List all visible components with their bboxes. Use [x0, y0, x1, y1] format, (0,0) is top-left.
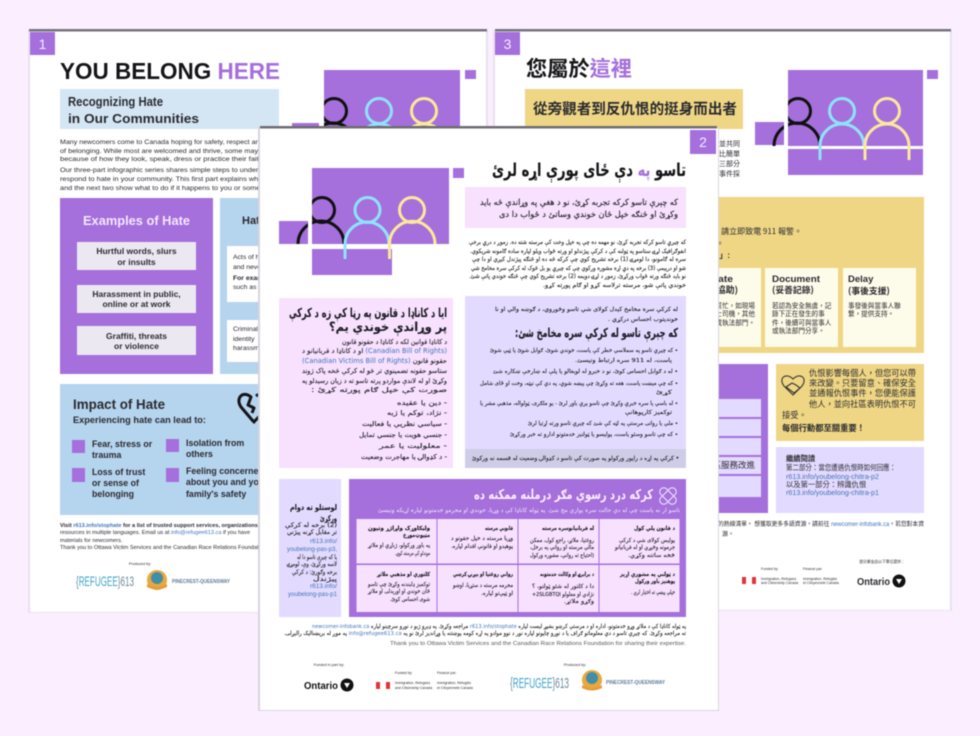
logos: Refugee 613 and Pinecrest-Queensway: {REFUGEE}613: [76, 573, 134, 589]
callout: every action matters: [776, 364, 924, 441]
intro text: [60, 139, 291, 192]
intro text: 三部分: [719, 159, 740, 168]
footer text: Thank you to Ottawa Victim Services and the Canadian Race Relations Foundation: [60, 545, 266, 551]
panel: examples of hate: Harassment in public,: [92, 289, 181, 299]
panel: reporting options: [500, 364, 768, 513]
panel: hate incidents and hate crimes: harassment: [233, 345, 269, 352]
page number 1: 1: [39, 36, 47, 52]
page 2: Pashto: [258, 126, 719, 711]
intro text: 比簡單: [719, 149, 740, 158]
footer text: په ټوله کاناډا کې د ملاتړ وړو خدمتونو، اداره او د مرستې کرښو بشپړ لیست لپاره r613.info/stophate مراجعه وکړئ. په ډېرو ژبو د نورو سرچینو لپاره newcomer-infobank.ca: [312, 623, 686, 630]
panel: rights in Canada: د کاناډا قوانین لکه د کاناډا د حقونو قانون: [342, 338, 447, 346]
intro text: که چیرې تاسو کرکه تجربه کړئ، نو مهمه ده چې په خپل وخت کې مرسته شته ده. زموږ د درې برخې: [469, 239, 686, 247]
page number 2: [690, 130, 716, 154]
panel: keep reading: لوستلو ته دوام: [290, 503, 337, 512]
intro text: سره له ګامونو، دا لومړۍ (1) برخه تشریح کوي چې کرکه څه ده او څنګه پیژندل کیږي او دا چې: [472, 256, 686, 264]
table of services: خپلې پیښې ته اختیار لري .: [631, 590, 675, 596]
panel: keep reading: r613.info/: [310, 583, 337, 590]
logos: funders: Immigration, Réfugiés: [437, 681, 471, 685]
panel: impact of hate: others: [186, 449, 213, 459]
panel: keep reading: r613.info/: [310, 538, 337, 545]
logos: funders: et Citoyenneté Canada: [803, 581, 839, 585]
panel: hate incidents and hate crimes: such as: [233, 284, 257, 291]
table of services: توکمیز ډلبندنه وکړئ چې تاسو: [367, 581, 430, 588]
footer text: [284, 623, 686, 647]
table of services: نژادي او معلولو 2SLGBTQI+: [532, 592, 594, 598]
logos: Refugee 613 and Pinecrest-Queensway: [510, 663, 665, 692]
panel: the 5 Ds: 件，後續可與當事人: [772, 318, 832, 327]
table of services: وګړو ملاتړ.: [564, 598, 594, 605]
table of services: کلتوري او مذهبي ملاتړ: [376, 571, 431, 578]
logos: funders: et Citoyenneté Canada: [437, 686, 473, 690]
panel: the 5 Ds: 安全幫忙，如現場: [702, 301, 755, 310]
table of services: مالي مرسته او رواني په برخل،: [530, 545, 594, 551]
panel: rights in Canada: - جنسي هویت یا جنسي تمایل: [359, 431, 448, 439]
table of services: څخه ساتنه وکړي.: [628, 552, 676, 559]
intro text: 並共同: [719, 139, 740, 148]
subtitle banner: [60, 89, 279, 129]
logos: funders: Funded by:: [395, 671, 413, 675]
panel: examples of hate: [60, 198, 213, 374]
subtitle banner: in Our Communities: [68, 111, 199, 126]
panel: keep reading: برخه وګورئ: د کرکې: [292, 569, 337, 577]
logos: Refugee 613 and Pinecrest-Queensway: Produced by:: [129, 562, 151, 566]
logos: funders: Financé par:: [437, 671, 456, 675]
table of services: جرمونه وڅیړي او له قربانیانو: [614, 545, 675, 551]
panel: rights in Canada: صورت کې خپل ګام پورته کړئ :: [311, 386, 447, 395]
panel: rights in Canada: (Canadian Bill of Rights) او د کاناډا د قربانیانو د: [302, 347, 447, 355]
intro text: خوندي پاتې شو، مرسته ترلاسه کړو او ګام پورته کړو.: [543, 282, 686, 290]
panel: rights in Canada: - د کډوالۍ یا مهاجرت وضعیت: [361, 453, 448, 461]
panel: hate hurts but healing is possible: کرکه درد رسوي مګر درملنه ممکنه ده: [474, 487, 653, 503]
callout: every action matters: 來改變。只要留意、確保安全: [809, 378, 917, 388]
logos: Refugee 613 and Pinecrest-Queensway: PINECREST-QUEENSWAY: [606, 680, 665, 686]
panel: when you witness hate: • که چیرې تاسو په سملاسي خطر کې یاست، خوندي شوئ، ګوابل شوئ یا ټپي شوئ: [490, 347, 678, 354]
table of services: ځان خوندي او اورېدلی او ملاتړ: [367, 589, 430, 595]
footer text: materials for newcomers.: [60, 538, 123, 544]
panel: examples of hate: Examples of Hate: [83, 214, 190, 228]
panel: when you witness hate: توکمیز کارپوهانې: [625, 409, 673, 416]
page 1: Recognizing Hate: [28, 29, 488, 613]
panel: keep reading: youbelong-pas-p1: [288, 591, 337, 598]
table of services: وړیا مرسته د خپل حقونو د: [451, 536, 513, 542]
panel: the 5 Ds: [500, 197, 924, 353]
panel: keep reading: youbelong-pas-p3,: [287, 546, 337, 553]
logos: Refugee 613 and Pinecrest-Queensway: PINECREST-QUEENSWAY: [172, 579, 230, 585]
logos: funders: Immigration, Réfugiés: [803, 577, 837, 581]
people illustration (page 2): [279, 168, 464, 275]
panel: continue reading: 以及第一部分：辨識仇恨: [786, 480, 867, 490]
panel: the 5 Ds: 事發後與當事人聯: [848, 301, 901, 310]
title: YOU BELONG HERE: [60, 58, 280, 84]
intro text: and the next two show what to do if it happens to you or someone else.: [60, 185, 290, 192]
panel: impact of hate: Experiencing hate can lead to:: [73, 415, 206, 426]
panel: continue reading: [776, 447, 924, 513]
people illustration (page 1): [292, 70, 476, 146]
panel: when you witness hate: یاست، له 911 سره ارتباط ونیسئ.: [575, 358, 673, 364]
footer text: resources in multiple languages. Email us at info@refugee613.ca if you have: [60, 530, 250, 536]
table of services: دا د کلتور له شئو ټولنو، ؟: [532, 583, 595, 590]
intro text: انفوګرافيک لړۍ ستاسو په ټولنه کې د کرکې پیژندلو او ورته ځواب ویلو لپاره ساده ګامونه شریکوي.: [470, 248, 686, 256]
panel: when you witness hate: • کرکې په اړه د راپور ورکولو په صورت کې تاسو د کډوالۍ وضعیت له قسمه نه ورکوئ: [472, 455, 679, 462]
panel: impact of hate: or sense of: [92, 478, 139, 488]
panel: the 5 Ds: 尋求協助): [699, 283, 738, 296]
panel: examples of hate: Hurtful words, slurs: [96, 246, 177, 256]
panel: the 5 Ds: 。: [716, 238, 724, 249]
logos: Refugee 613 and Pinecrest-Queensway: {REFUGEE}613: [510, 675, 569, 692]
panel: when you witness hate: • له د ګوابل احساس کوئ، نو د خبرو له لوبغالو یا پلې له ښارخې ښکاره شئ: [493, 368, 678, 375]
table of services: ولڼکاوړک ولړاژړ و‌تیون: [368, 525, 431, 532]
panel: the 5 Ds: 若認為安全無虞，記: [772, 301, 832, 310]
panel: impact of hate: family's safety: [186, 489, 246, 499]
panel: the 5 Ds: Document: [772, 274, 821, 285]
intro text: of belonging. While most are welcomed and thrive, some may face hate: [60, 148, 291, 155]
panel: reporting options: 區服務改進: [712, 459, 755, 471]
panel: when you witness hate: له کرکې سره مخامخ کېدل کولای شي تاسو وڅوروي، د ګوښه والي او نا: [495, 306, 678, 313]
intro text: respond to hate in your community. This first part explains what hate is,: [60, 176, 290, 183]
panel: continue reading: 第二部分：當您遭遇仇恨時如何回應：: [786, 463, 896, 473]
table of services: د قانون پلي کول: [634, 525, 675, 532]
table of services: قانوني مرسته: [485, 526, 513, 532]
table of services: [356, 519, 680, 612]
table of services: شوی احساس کوئ.: [390, 596, 430, 603]
table of services: پوهنیز باور ورکول: [635, 578, 675, 585]
panel: hate incidents and hate crimes: Acts of hate: [233, 254, 269, 261]
panel: hate incidents and hate crimes: [220, 198, 330, 374]
panel: when you witness hate: • ملي یا روانی مرستې په لټه کې شئ که چیرې تاسو ورته اړتیا لرئ: [528, 420, 678, 427]
panel: when you witness hate: [465, 296, 686, 468]
page 3: From Bystander to Upstander: [493, 29, 952, 611]
title: تاسو په دې ځای پورې اړه لرئ: [492, 160, 686, 184]
logos: funders: Financé par:: [803, 567, 822, 571]
icon: broken heart: [239, 394, 269, 423]
logos: funders: Ontario: [857, 577, 890, 588]
panel: rights in Canada: - نژاد، توکم یا ژبه: [387, 409, 448, 417]
panel: hate incidents and hate crimes: identity: [233, 336, 255, 343]
table of services: او ټپي‌تو لپاره.: [481, 591, 513, 597]
footer text: 的熱線清單。 想獲取更多多語資源，請前往 newcomer-infobank.ca。若您對本資: [718, 520, 924, 528]
footer text: Thank you to Ottawa Victim Services and the Canadian Race Relations Foundation for sharing their expertise.: [390, 641, 686, 647]
page number 1: [30, 32, 55, 55]
panel: rights in Canada: وکړئ او له لاندې مواردو پرته تاسو ته د زیان رسیدلو په: [302, 377, 447, 386]
subtitle banner: 從旁觀者到反仇恨的挺身而出者: [533, 98, 737, 119]
callout: every action matters: 他人，並向社區表明仇恨不可: [809, 399, 916, 409]
logos: funders: and Citizenship Canada: [761, 581, 798, 585]
table of services: محرمه مرسته د ستړیا، اوښو: [452, 583, 513, 589]
panel: the 5 Ds: 人員或執法部門。: [702, 318, 755, 327]
logos: funders: and Citizenship Canada: [395, 686, 432, 690]
panel: the 5 Ds: D」:: [714, 251, 730, 260]
panel: the 5 Ds: Delay: [848, 274, 874, 285]
logos: funders: Ontario: [304, 681, 338, 692]
footer text: Visit r613.info/stophate for a list of trusted support services, organizations and: [60, 523, 270, 529]
callout: every action matters: 接受。: [782, 410, 807, 420]
panel: when you witness hate: • که چې تاسو وسئو یاست، پولیسو یا ټولنیز خدمتونو ادارو ته خبر ورکړئ: [510, 431, 678, 438]
panel: when you witness hate: • له باسي یا سره خبرې وکړئ چې تاسو پرې باور لرئ - یو ملګری، ټولواله، مذهبي مشر یا: [480, 400, 678, 407]
panel: keep reading: یا که چیرې تاسو دا له: [297, 554, 337, 562]
panel: the 5 Ds: 錄下正在發生的事: [772, 309, 825, 318]
logos: Refugee 613 and Pinecrest-Queensway: [76, 562, 230, 590]
panel: the 5 Ds: (妥善記錄): [772, 283, 814, 296]
footer text: ته مراجعه وکړئ. که چیرې تاسو د دې معلوماتو ګراف یا د نورو چاپونو لپاره نور د نوو موادو په اړه کومه پوښتنه یا وړاندیز لرئ نو په info@refugee613.ca په موږ له برېښنالیک رالیږلی.: [284, 630, 686, 637]
panel: examples of hate: online or at work: [102, 299, 171, 309]
panel: keep reading: تر مقابل کړنه پیژني: [287, 529, 337, 536]
panel: keep reading: ورکړئ: [320, 514, 337, 523]
panel: when you witness hate: که چېرې تاسو له کرکې سره مخامخ شئ:: [515, 325, 678, 342]
table of services: پوهېدو او قانوني اقدام لپاره.: [451, 544, 513, 550]
footer text: [718, 520, 924, 538]
intro text: [469, 239, 686, 290]
panel: keep reading: [279, 479, 341, 617]
panel: when you witness hate: • که چې میښت یاست، هغه ته وکړئ چې پیښه شوې، په دې کې نېټه، وخت او ځای شامل: [480, 380, 678, 387]
panel: continue reading: r613.info/youbelong-chitra-p2: [786, 472, 879, 481]
footer text: 源。: [722, 530, 734, 538]
table of services: رواني روغتیا او بیړنۍ کرښې: [453, 571, 513, 578]
panel: hate hurts but healing is possible: [349, 479, 686, 617]
panel: rights in Canada: ستاسو حقونه تضمینوي تر څو له کرکې څخه پاک ژوند: [302, 367, 447, 376]
intro text: 事件採: [719, 169, 740, 178]
panel: hate hurts but healing is possible: تاسو ار نه یاست چې له دې حالت سره یوازې مخ شئ. په ټوله کاناډا کې د وړیا، خوندي او محرمو خدمتونو لپاره اړیکه ونیسئ: [378, 507, 680, 514]
table of services: روغتیا، ملاتړ، راجع کول، ممکن: [530, 537, 594, 544]
panel: the 5 Ds: (事後支援): [848, 284, 890, 297]
page number 3: [495, 32, 520, 55]
panel: impact of hate: Fear, stress or: [92, 439, 153, 449]
panel: keep reading: پیژندل: [313, 576, 337, 583]
panel: rights in Canada: پر وړاندې خوندي یم؟: [329, 319, 447, 336]
logos: funders: 部分資金由以下單位提供：: [859, 559, 905, 565]
panel: impact of hate: Impact of Hate: [73, 396, 165, 412]
panel: keep reading: (2) برخه له کرکې: [285, 522, 337, 530]
title: 您屬於這裡: [526, 53, 632, 83]
panel: hate incidents and hate crimes: Criminal: [233, 326, 258, 333]
table of services: پولیس کولای شي د کرکې: [619, 537, 675, 544]
panel: examples of hate: Graffiti, threats: [106, 331, 167, 341]
logos: funders: Immigration, Refugees: [395, 681, 430, 685]
panel: impact of hate: belonging: [92, 489, 134, 499]
table of services: په باور ورکولو، ژباړې او ملاتړ: [367, 542, 430, 549]
subtitle banner: Recognizing Hate: [68, 94, 163, 109]
panel: continue reading: r613.info/youbelong-chitra-p1: [786, 488, 879, 497]
people illustration (page 3): [755, 70, 938, 175]
subtitle banner: [465, 187, 686, 228]
logos: funders: Funded in part by:: [314, 663, 344, 667]
panel: impact of hate: about you and your: [186, 477, 268, 487]
page number 3: 3: [504, 36, 512, 52]
panel: when you witness hate: کړئ: [656, 389, 673, 396]
panel: rights in Canada: ایا د کاناډا د قانون په رڼا کې زه د کرکې: [289, 305, 447, 322]
panel: when you witness hate: خوندیتوب احساس درکړي .: [608, 316, 678, 323]
subtitle banner: وکړئ او څنګه خپل ځان خوندي وساتئ د ځواب دا دی: [499, 210, 678, 220]
intro text: شو او درېیمې (3) برخه په دې اړه مشوره ورکوي چې که چیرې یو بل څوک له کرکې سره مخامخ شي: [471, 264, 686, 273]
panel: the 5 Ds: Delegate: [690, 274, 733, 285]
icon: heart with handshake: [782, 376, 804, 395]
panel: the 5 Ds: 繫，提供支持。: [848, 309, 894, 318]
panel: hate incidents and hate crimes: Hate: [242, 215, 266, 227]
panel: examples of hate: or violence: [114, 341, 159, 351]
panel: impact of hate: Loss of trust: [92, 467, 145, 477]
callout: every action matters: 仇恨影響每個人，但您可以帶: [809, 368, 916, 378]
panel: keep reading: لاسه ورکړئ، وې، لومړۍ: [286, 561, 337, 569]
table of services: (احتیاج ته رواني، مشوره ورکول: [530, 552, 594, 559]
logos: funders: [304, 663, 473, 692]
callout: every action matters: 每個行動都至關重要！: [782, 423, 865, 433]
panel: the 5 Ds: ，請立即致電 911 報警。: [713, 226, 802, 237]
panel: continue reading: 繼續閱讀: [786, 454, 816, 464]
intro text: [719, 139, 740, 178]
panel: the 5 Ds: 職員、巴士司機，其他: [689, 309, 755, 318]
intro text: نو باید څنګه ورته ځواب ورکړئ، زموږ د لړۍ دویمه (2) برخه تشریح کوي چې څنګه خوندي پاتې شئ.: [469, 273, 686, 281]
panel: rights in Canada: - سیاسي نظریې یا فعالیت: [362, 420, 448, 429]
panel: hate incidents and hate crimes: For example: [233, 275, 273, 282]
table of services: مټیوټ‌موړخ: [403, 533, 430, 539]
panel: examples of hate: or insults: [117, 257, 156, 267]
panel: impact of hate: [60, 384, 290, 515]
icon: bandages: [658, 486, 678, 506]
table of services: له قربانیانوسره مرسته: [542, 526, 594, 532]
intro text: Many newcomers come to Canada hoping for safety, respect and a sense: [60, 139, 291, 146]
intro text: Our three-part infographic series shares simple steps to understand and: [60, 167, 291, 174]
panel: impact of hate: Feeling concerned: [186, 466, 264, 476]
callout: every action matters: 並通報仇恨事件，您便能保護: [809, 388, 917, 398]
intro text: because of how they look, speak, dress or practice their faith.: [60, 156, 265, 163]
panel: impact of hate: trauma: [92, 450, 121, 460]
panel: hate incidents and hate crimes: and never: [233, 264, 264, 271]
logos: funders: [742, 559, 906, 588]
logos: Refugee 613 and Pinecrest-Queensway: Produced by:: [564, 663, 586, 667]
panel: rights in Canada: حقونو قانون (Canadian Victims Bill of Rights): [302, 357, 447, 365]
table of services: موندلو کې مرسته کوي.: [395, 550, 430, 557]
logos: funders: Immigration, Refugees: [761, 577, 796, 581]
footer text: [60, 523, 270, 551]
panel: rights in Canada: [279, 298, 453, 468]
subtitle banner: [525, 89, 743, 129]
panel: the 5 Ds: 或執法部門分享。: [772, 326, 825, 335]
table of services: د ټولنې په مشورې اړیز: [619, 572, 675, 578]
panel: rights in Canada: - معلولیت یا عمر: [378, 442, 448, 450]
panel: rights in Canada: - دین یا عقیده: [397, 399, 448, 407]
subtitle banner: که چېرې تاسو کرکه تجربه کړئ، نو د هغې په وړاندې څه باید: [480, 198, 679, 208]
panel: impact of hate: Isolation from: [186, 438, 244, 448]
table of services: د برابرۍ او وکالت خدمتونه: [540, 571, 594, 578]
page number 2: 2: [699, 134, 707, 150]
logos: funders: Funded by:: [761, 567, 779, 571]
